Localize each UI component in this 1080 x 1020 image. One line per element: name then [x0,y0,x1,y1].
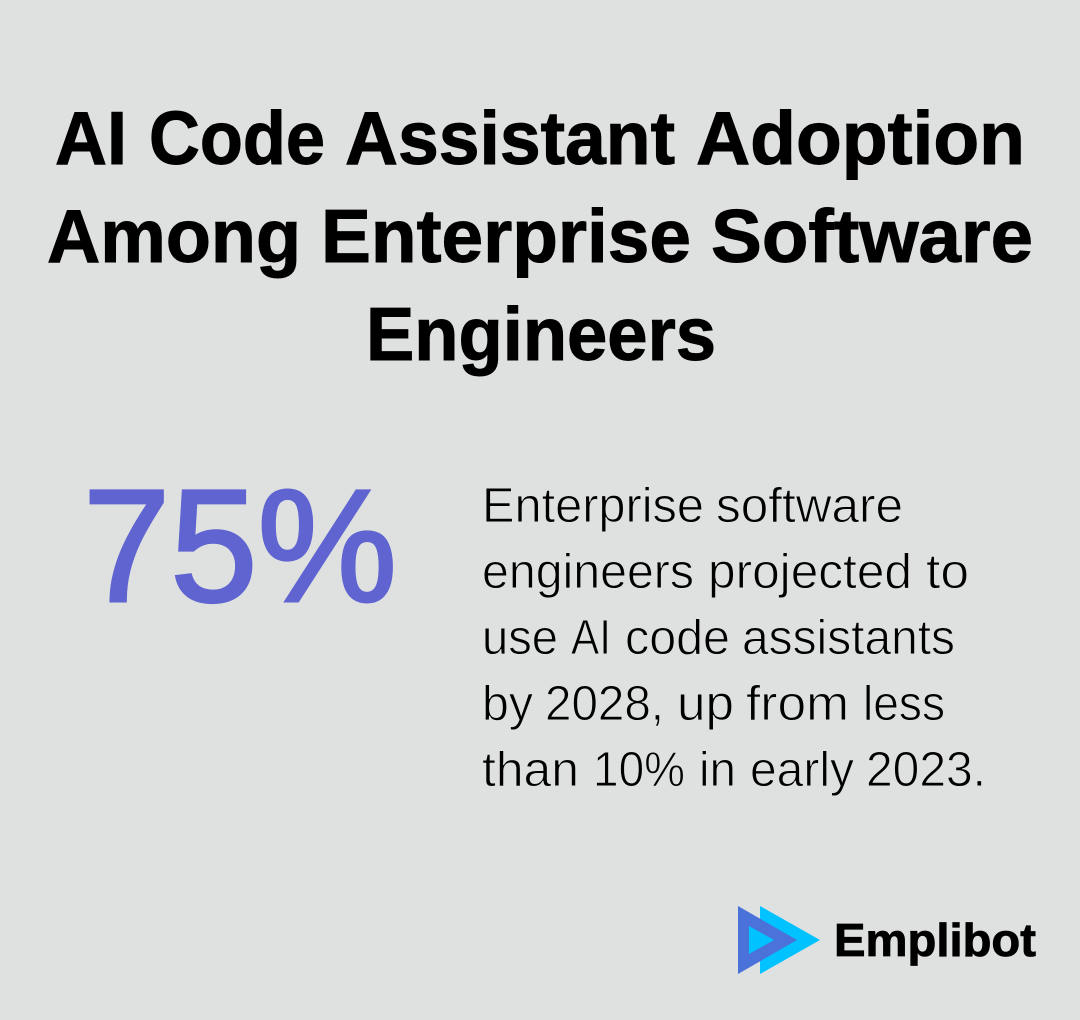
description text: 2028, [545,677,664,731]
description text: code [625,611,730,665]
description text: 2023. [866,743,986,797]
description text: than [482,743,579,797]
title: Adoption [696,96,1025,180]
title [47,96,1033,376]
description text: early [750,743,854,797]
logo: Emplibot [738,906,1036,974]
title: Enterprise [321,194,691,278]
title: Code [149,96,325,180]
description text: AI [571,611,611,665]
description text: projected [708,545,912,599]
description text: Enterprise [482,479,704,533]
description text: 10% [593,743,685,797]
title: Engineers [366,292,716,376]
description text: use [482,611,558,665]
description text: up [677,677,734,731]
description text: to [926,545,969,599]
logo wordmark: Emplibot [834,914,1036,966]
title: Among [47,194,301,278]
title: Assistant [345,96,675,180]
description text: in [699,743,736,797]
description text: from [746,677,849,731]
description text: assistants [742,611,955,665]
title: AI [55,96,127,180]
big statistic: 75%: 75% [83,456,397,635]
description text: software [716,479,903,533]
description text [482,479,986,797]
description text: less [863,677,945,731]
description text: by [482,677,533,731]
title: Software [711,194,1033,278]
description text: engineers [482,545,694,599]
icon: play triangles [738,906,820,974]
